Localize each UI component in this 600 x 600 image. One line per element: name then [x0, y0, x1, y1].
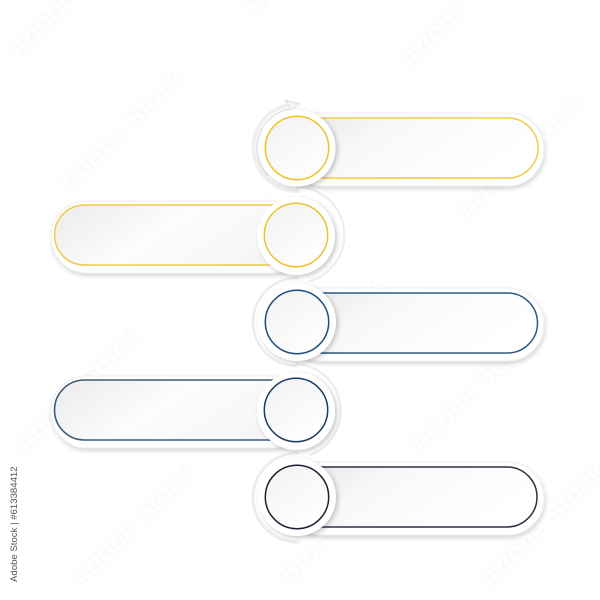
circle badge [258, 283, 336, 361]
watermark pattern: Adobe Stock [63, 456, 202, 594]
step 1: yellow right pill [258, 110, 544, 186]
step 3: blue right pill [258, 283, 544, 361]
pill body [51, 376, 307, 448]
pill body [285, 462, 544, 535]
step 5: dark right pill [258, 458, 544, 536]
stock credit: Adobe Stock | #613384412 [9, 466, 20, 582]
pill outline [54, 205, 308, 265]
step 2: yellow left pill [51, 197, 335, 275]
pill outline [285, 118, 538, 178]
arc: step 1 with arrow [254, 100, 300, 191]
watermark pattern: Stock [318, 270, 392, 344]
circle badge [257, 372, 335, 450]
watermark pattern: Adobe Stock [451, 88, 590, 226]
pill body [285, 113, 544, 186]
pill body [285, 288, 544, 361]
circle badge [257, 197, 335, 275]
watermark pattern: Adobe Stock [8, 321, 147, 459]
pill outline [285, 293, 538, 353]
connector arcs between steps [253, 100, 344, 542]
watermark pattern: Stock [273, 515, 347, 589]
circle badge [258, 110, 336, 186]
arc: step 4 [296, 364, 341, 455]
pill outline [285, 467, 537, 527]
step 4: navy left pill [51, 372, 335, 450]
pill outline [54, 380, 308, 440]
arc: step 2 [296, 187, 344, 281]
circle badge [258, 458, 336, 536]
watermark pattern: Adobe Stock [53, 61, 192, 199]
arc: step 3 [253, 278, 297, 366]
arc: step 5 [253, 453, 298, 542]
watermark pattern: Adobe Stock [403, 321, 542, 459]
pill body [51, 201, 307, 273]
watermark pattern: Adobe [203, 189, 284, 269]
